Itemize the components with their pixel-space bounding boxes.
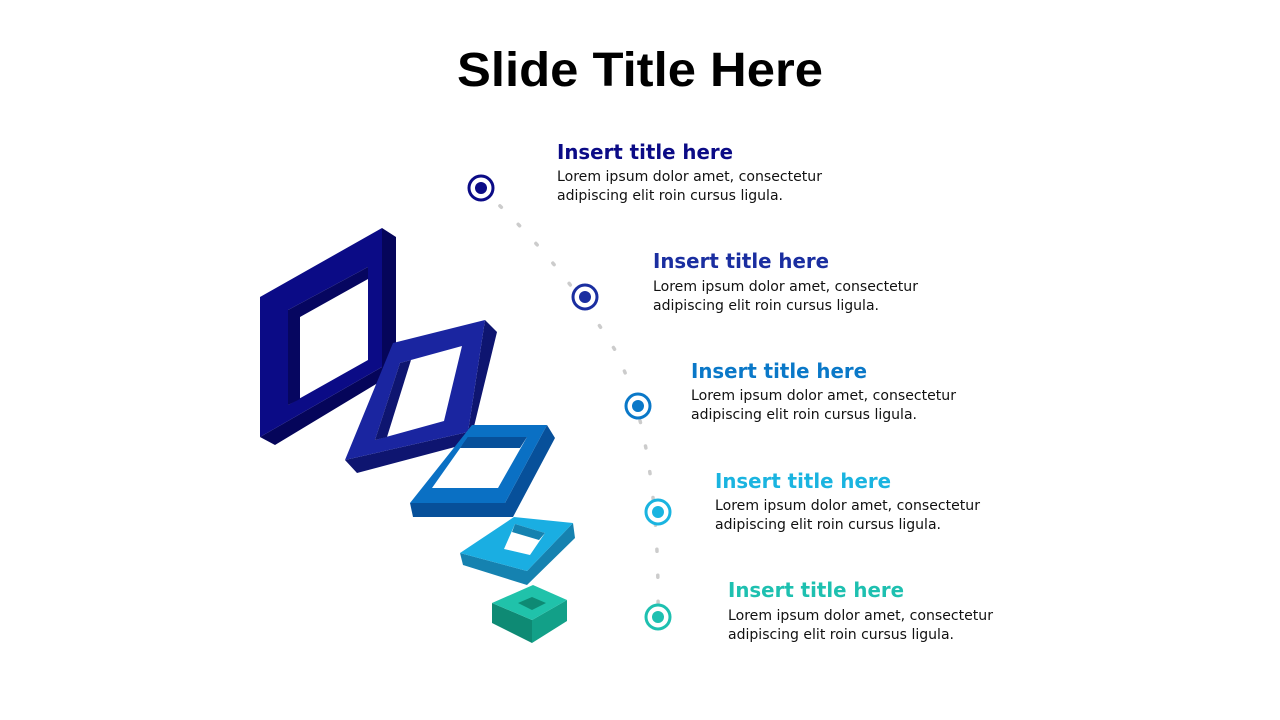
3D frame 4 bbox=[460, 517, 575, 585]
text block 5: Lorem ipsum dolor amet, consectetur bbox=[728, 608, 993, 624]
text block 4: Insert title here bbox=[715, 469, 891, 493]
text block 2: Lorem ipsum dolor amet, consectetur bbox=[653, 279, 918, 295]
3D frame 3 bbox=[410, 425, 555, 517]
3D frame 2 bbox=[345, 320, 497, 473]
text block 4 bbox=[715, 469, 980, 533]
dotted connector bbox=[481, 188, 658, 617]
text block 3: Lorem ipsum dolor amet, consectetur bbox=[691, 388, 956, 404]
text block 5: Insert title here bbox=[728, 578, 904, 602]
text block 3 bbox=[691, 359, 956, 423]
markers bbox=[469, 176, 670, 629]
text block 1: adipiscing elit roin cursus ligula. bbox=[557, 188, 783, 204]
text block 1 bbox=[557, 140, 822, 204]
text block 5: adipiscing elit roin cursus ligula. bbox=[728, 627, 954, 643]
text block 1: Insert title here bbox=[557, 140, 733, 164]
3D frame 1 bbox=[260, 228, 396, 445]
title: Slide Title Here bbox=[457, 44, 823, 97]
text block 4: adipiscing elit roin cursus ligula. bbox=[715, 517, 941, 533]
text block 5 bbox=[728, 578, 993, 643]
3D frame 5 bbox=[492, 585, 567, 643]
text block 3: adipiscing elit roin cursus ligula. bbox=[691, 407, 917, 423]
text block 2: adipiscing elit roin cursus ligula. bbox=[653, 298, 879, 314]
text block 2 bbox=[653, 249, 918, 314]
text block 3: Insert title here bbox=[691, 359, 867, 383]
text block 2: Insert title here bbox=[653, 249, 829, 273]
text block 1: Lorem ipsum dolor amet, consectetur bbox=[557, 169, 822, 185]
text block 4: Lorem ipsum dolor amet, consectetur bbox=[715, 498, 980, 514]
